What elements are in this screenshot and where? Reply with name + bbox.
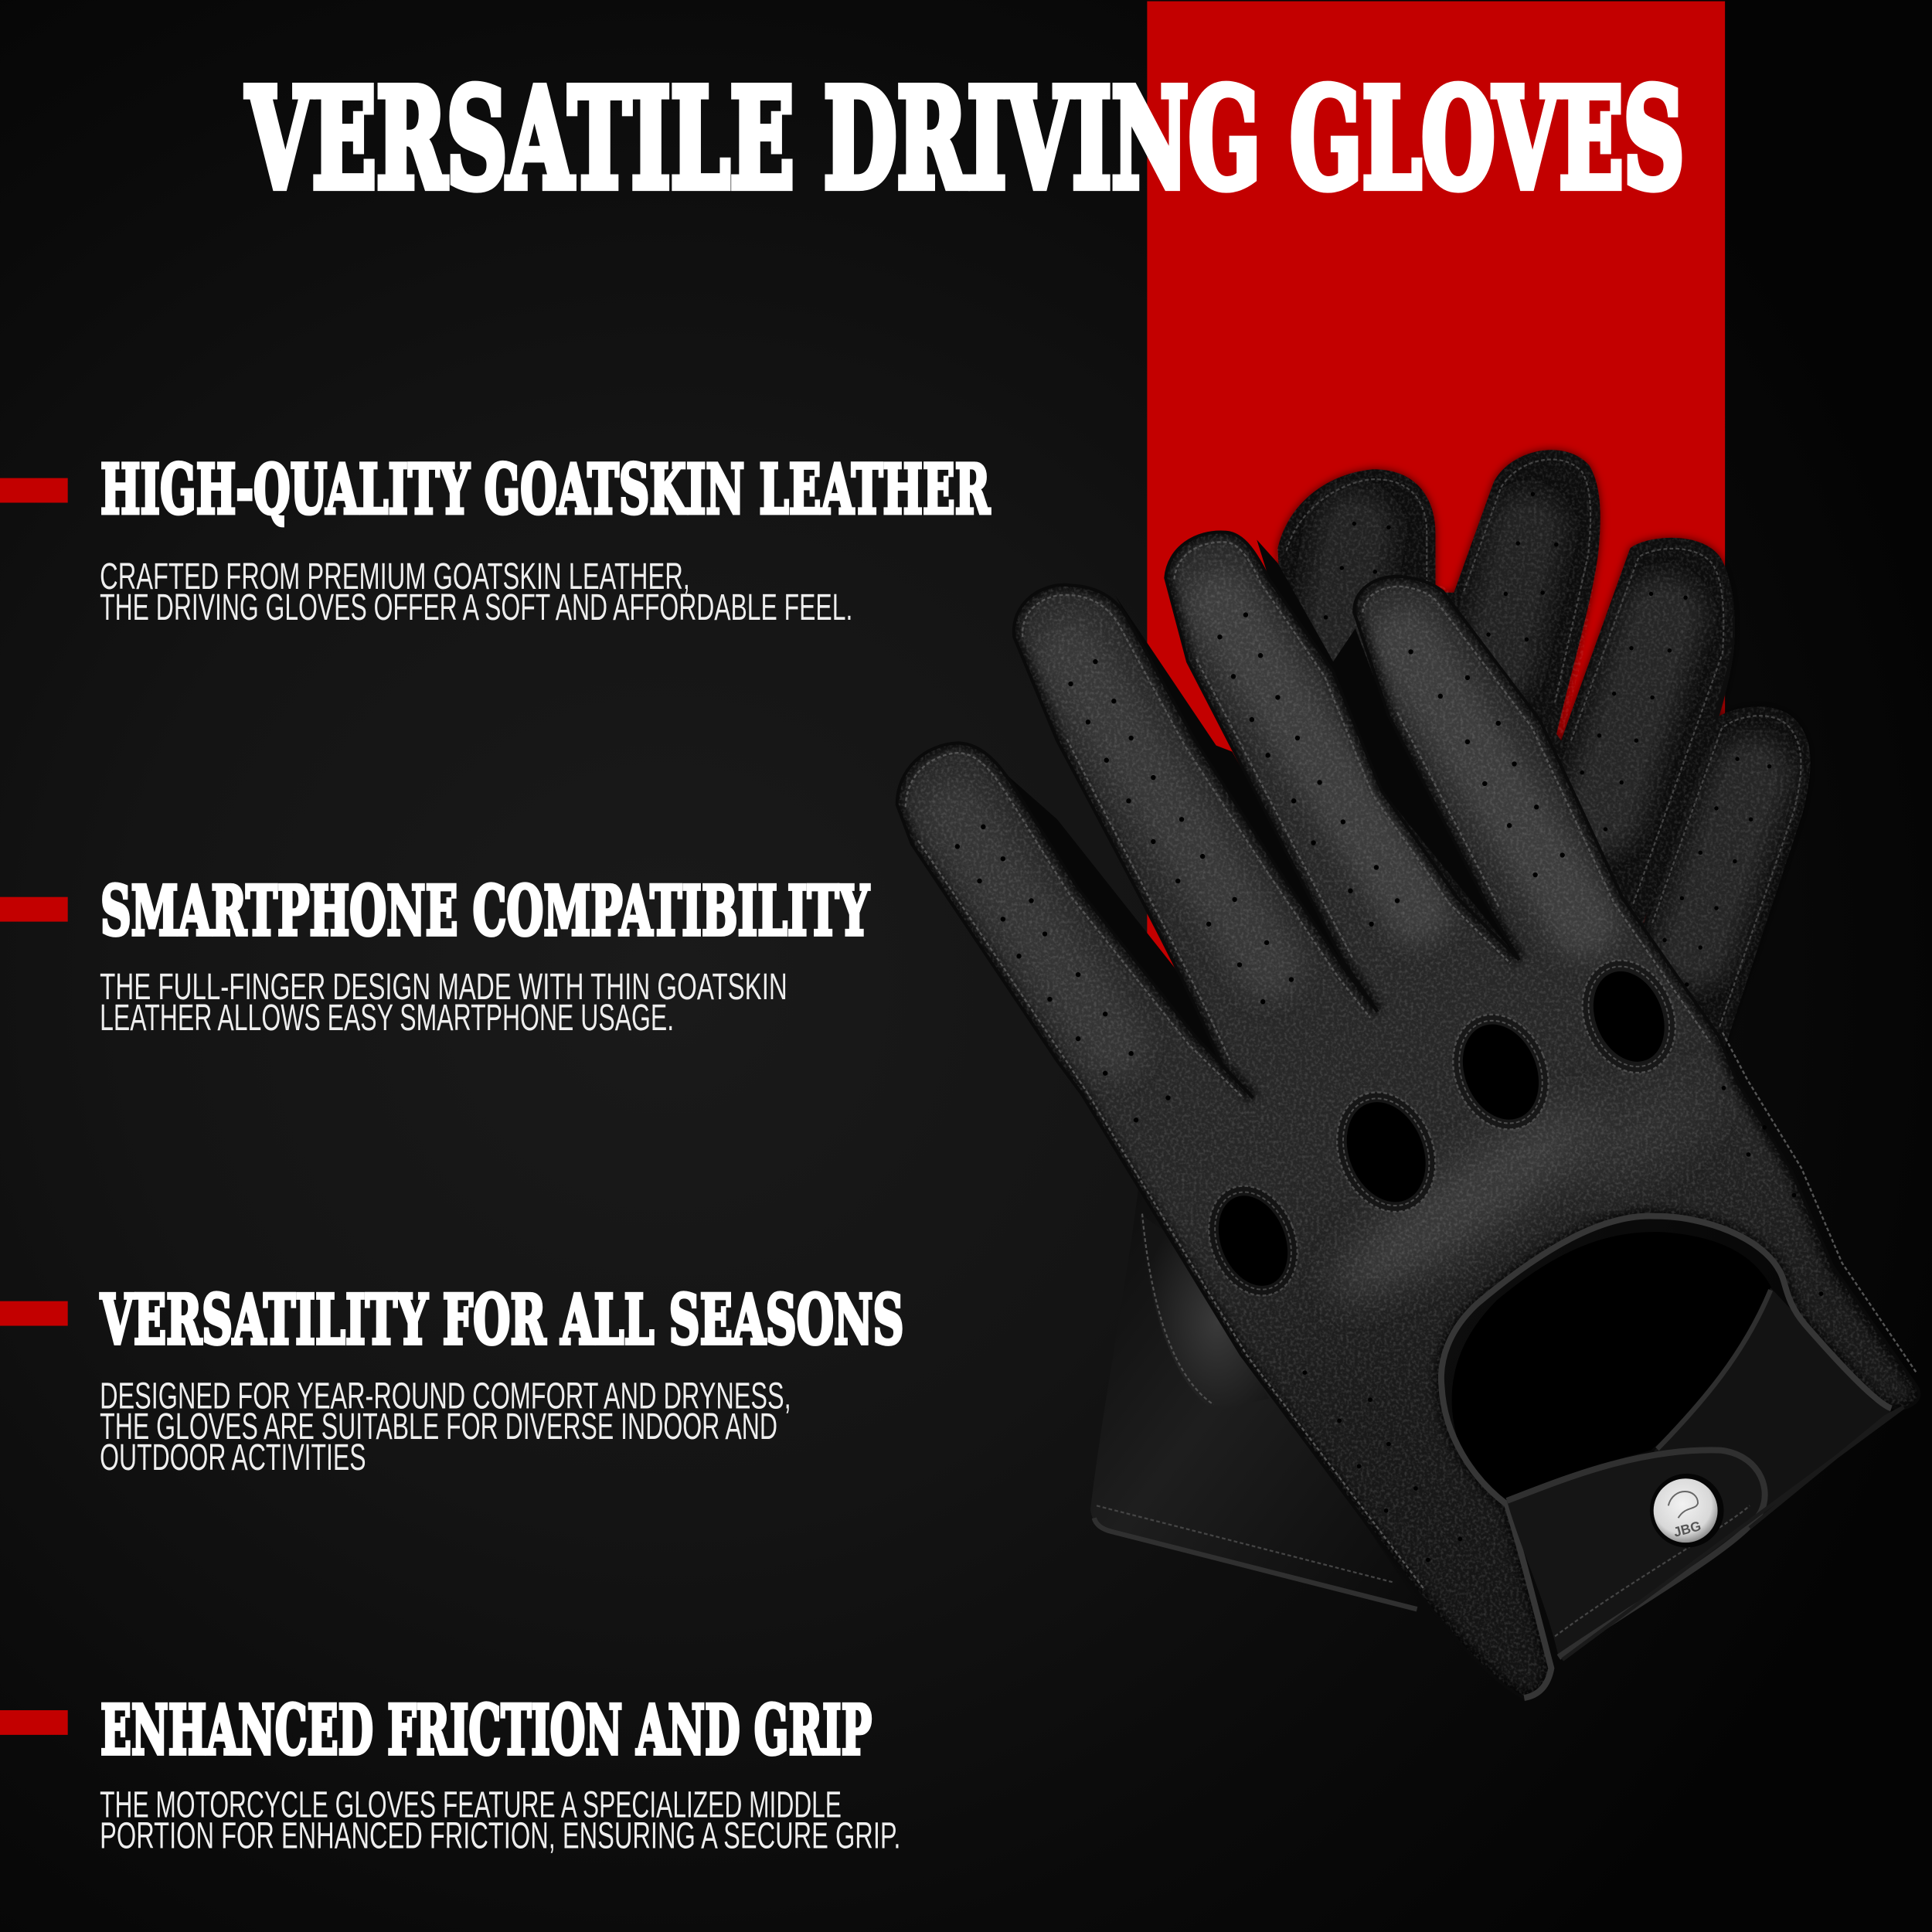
feature 2 xyxy=(0,871,870,1039)
red vertical panel xyxy=(1147,2,1725,974)
red marker 1 xyxy=(0,478,68,503)
red marker 3 xyxy=(0,1301,68,1326)
snap button: JBG xyxy=(1672,1518,1702,1540)
front glove perforations xyxy=(955,612,1823,1562)
body text 4: PORTION FOR ENHANCED FRICTION, ENSURING A SECURE GRIP. xyxy=(100,1816,900,1857)
feature 1 xyxy=(0,450,991,628)
heading 1: HIGH-QUALITY GOATSKIN LEATHER xyxy=(100,450,991,529)
body text 3: OUTDOOR ACTIVITIES xyxy=(100,1437,366,1478)
back glove fingers xyxy=(1232,450,1811,1060)
body text 2: THE FULL-FINGER DESIGN MADE WITH THIN GOATSKIN xyxy=(100,967,787,1008)
finger side walls and gaps xyxy=(974,539,1519,1098)
gloves illustration xyxy=(887,444,1932,1713)
hole 1 xyxy=(1193,1172,1313,1309)
body text 4 xyxy=(100,1785,900,1857)
back glove perforations xyxy=(1324,492,1771,987)
body text 1: THE DRIVING GLOVES OFFER A SOFT AND AFFORDABLE FEEL. xyxy=(100,587,852,628)
front glove stitching xyxy=(906,542,1917,1590)
hole 2 xyxy=(1320,1077,1453,1226)
heading 2: SMARTPHONE COMPATIBILITY xyxy=(100,871,870,951)
body text 1 xyxy=(100,556,852,628)
edge shading xyxy=(897,532,1919,1698)
back glove leather shading xyxy=(1269,444,1824,1072)
body text 2 xyxy=(100,967,787,1039)
leather grain xyxy=(887,518,1932,1713)
hole 4 xyxy=(1566,946,1692,1087)
opening piping xyxy=(1441,1216,1891,1698)
front glove outline xyxy=(897,532,1919,1698)
body text 3: THE GLOVES ARE SUITABLE FOR DIVERSE INDOOR AND xyxy=(100,1406,777,1447)
snap button xyxy=(1650,1474,1724,1548)
back glove cuff xyxy=(1090,1177,1423,1611)
finger hole openings xyxy=(1193,946,1692,1309)
body text 2: LEATHER ALLOWS EASY SMARTPHONE USAGE. xyxy=(100,998,674,1039)
heading 4: ENHANCED FRICTION AND GRIP xyxy=(100,1691,872,1770)
feature 3 xyxy=(0,1281,903,1478)
leather highlights xyxy=(955,604,1583,1047)
body text 4: THE MOTORCYCLE GLOVES FEATURE A SPECIALIZED MIDDLE xyxy=(100,1785,842,1826)
wrist strap xyxy=(1507,1407,1903,1660)
hole 3 xyxy=(1437,1000,1565,1144)
feature 4 xyxy=(0,1691,900,1857)
front glove surface xyxy=(887,518,1932,1713)
body text 3: DESIGNED FOR YEAR-ROUND COMFORT AND DRYNESS, xyxy=(100,1376,791,1417)
opening and wrist band xyxy=(1452,1232,1891,1528)
red marker 2 xyxy=(0,897,68,922)
back glove stitching xyxy=(1287,459,1801,1029)
body text 1: CRAFTED FROM PREMIUM GOATSKIN LEATHER, xyxy=(100,556,690,597)
red marker 4 xyxy=(0,1710,68,1735)
back glove thumb opening xyxy=(1140,1213,1269,1411)
far side band xyxy=(1654,1287,1891,1528)
body text 3 xyxy=(100,1376,791,1478)
heading 3: VERSATILITY FOR ALL SEASONS xyxy=(100,1281,903,1360)
back glove xyxy=(1090,444,1824,1611)
